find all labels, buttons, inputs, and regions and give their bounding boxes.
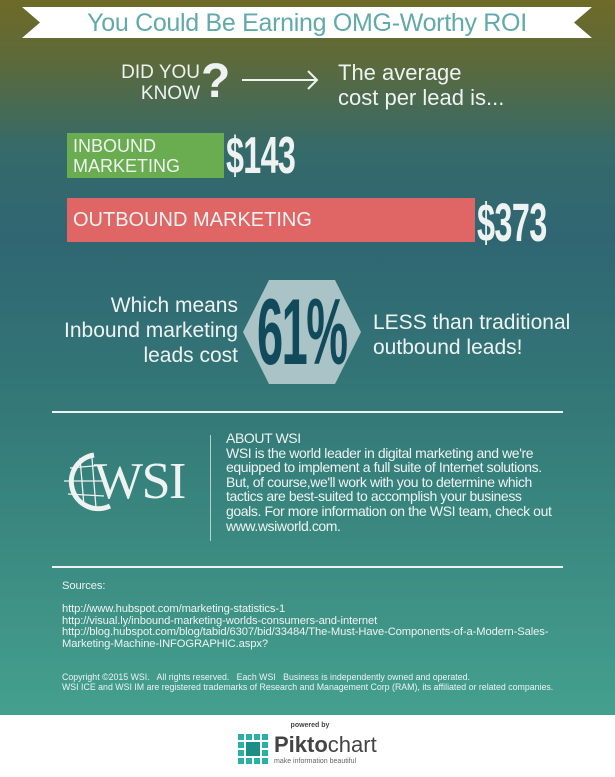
less than text: outbound leads! bbox=[373, 336, 522, 359]
piktochart footer: Piktochart bbox=[274, 732, 377, 757]
about WSI: ABOUT WSI bbox=[226, 430, 301, 446]
average cost text: The average bbox=[338, 60, 462, 85]
inbound value: $143 bbox=[226, 127, 295, 185]
which means text bbox=[64, 294, 238, 367]
sources: http://www.hubspot.com/marketing-statistics-1 bbox=[62, 603, 285, 615]
piktochart footer: powered by bbox=[291, 722, 329, 729]
less than text bbox=[373, 311, 570, 359]
average cost text: cost per lead is... bbox=[338, 85, 504, 110]
piktochart footer bbox=[238, 722, 377, 765]
copyright: WSI ICE and WSI IM are registered trademarks of Research and Management Corp (RAM), its affiliated or related companies. bbox=[62, 682, 553, 692]
inbound bar: INBOUND bbox=[73, 136, 156, 156]
outbound bar bbox=[67, 198, 475, 242]
average cost text bbox=[338, 60, 504, 110]
sources: Marketing-Machine-INFOGRAPHIC.aspx? bbox=[62, 638, 268, 650]
about WSI: goals. For more information on the WSI team, check out www.wsiworld.com. bbox=[226, 503, 551, 534]
sources: http://blog.hubspot.com/blog/tabid/6307/bid/33484/The-Must-Have-Components-of-a-Modern-Sales- bbox=[62, 626, 548, 638]
about WSI: WSI is the world leader in digital marketing and we're equipped to implement a full suite of Internet solutions. But, of course,we'll work with you to determine which tactics are best-suited to accomplish your business bbox=[226, 445, 542, 504]
copyright: Copyright ©2015 WSI. All rights reserved. Each WSI Business is independently owned and operated. bbox=[62, 672, 470, 682]
WSI logo: WSI bbox=[94, 453, 185, 510]
which means text: Inbound marketing bbox=[64, 319, 238, 342]
title banner: You Could Be Earning OMG-Worthy ROI bbox=[87, 9, 527, 37]
did you know bbox=[121, 62, 200, 104]
which means text: Which means bbox=[111, 294, 238, 317]
outbound value: $373 bbox=[477, 193, 547, 253]
copyright bbox=[62, 672, 553, 692]
piktochart footer: make information beautiful bbox=[274, 758, 356, 765]
outbound bar: OUTBOUND MARKETING bbox=[73, 209, 312, 231]
arrow bbox=[242, 70, 318, 90]
did you know: DID YOU bbox=[121, 62, 200, 83]
sources bbox=[62, 580, 548, 650]
did you know: KNOW bbox=[141, 83, 200, 104]
hexagon 61%: 61% bbox=[257, 279, 347, 384]
inbound bar: MARKETING bbox=[73, 156, 180, 176]
title banner bbox=[22, 7, 592, 38]
question mark: ? bbox=[201, 55, 230, 108]
inbound bar bbox=[67, 133, 224, 178]
sources: http://visual.ly/inbound-marketing-worlds-consumers-and-internet bbox=[62, 615, 377, 627]
sources: Sources: bbox=[62, 580, 105, 592]
less than text: LESS than traditional bbox=[373, 311, 570, 334]
about WSI bbox=[226, 430, 552, 534]
which means text: leads cost bbox=[143, 344, 238, 367]
